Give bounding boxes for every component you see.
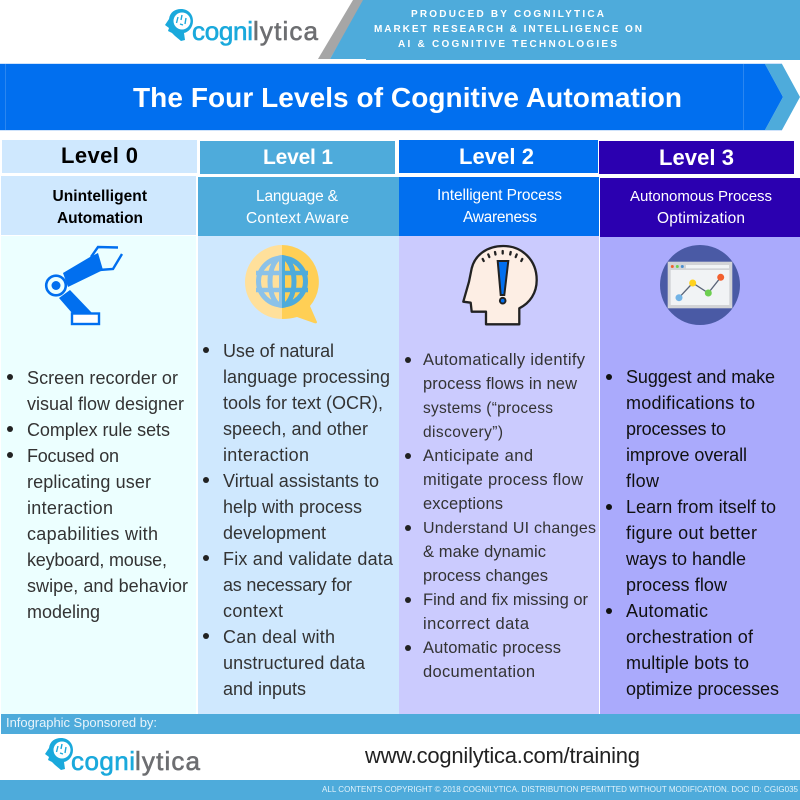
level 0 bullet list: keyboard, mouse, (27, 550, 167, 570)
level 1 subtitle: Context Aware (246, 210, 349, 227)
level 1 bullet list: language processing (223, 367, 390, 387)
level 2 bullet list: Understand UI changes (423, 520, 596, 537)
level 2 bullet list: Automatically identify (423, 351, 586, 369)
level 1 bullet list: Fix and validate data (223, 549, 394, 569)
level 2 bullet list (405, 351, 596, 681)
header banner: produced by: PRODUCED BY COGNILYTICA (411, 9, 604, 20)
level 0 bullet list: replicating user (27, 472, 151, 492)
level 3 bullet list: improve overall (626, 445, 747, 465)
level 1 subtitle (198, 177, 399, 236)
sponsor band: Infographic Sponsored by: (6, 715, 157, 730)
icon: head with exclamation mark (463, 246, 537, 324)
level 2 subtitle (399, 177, 599, 236)
level 2 bullet list: mitigate process flow (423, 471, 583, 489)
level 3 bullet list: processes to (626, 419, 726, 439)
copyright footer (0, 780, 800, 800)
level 2 bullet list: Anticipate and (423, 447, 533, 465)
level 1 bullet list: speech, and other (223, 419, 368, 439)
sponsor band (1, 714, 800, 734)
panel: level 3 (599, 141, 800, 714)
level 2 subtitle: Awareness (463, 209, 537, 226)
level 3 bullet list (606, 367, 779, 699)
level 3 subtitle: Optimization (657, 210, 745, 227)
level 0 bullet list: Complex rule sets (27, 420, 170, 440)
level 2 bullet list: exceptions (423, 495, 503, 513)
level 0 bullet list: modeling (27, 602, 100, 622)
header banner: produced by: MARKET RESEARCH & INTELLIGENCE ON (374, 24, 642, 35)
copyright footer: ALL CONTENTS COPYRIGHT © 2018 COGNILYTICA. DISTRIBUTION PERMITTED WITHOUT MODIFICATION. DOC ID: CGIG035 (322, 785, 799, 794)
level 3 subtitle (600, 178, 800, 237)
level 3 bullet list: Learn from itself to (626, 497, 776, 517)
level 3 bullet list: multiple bots to (626, 653, 749, 673)
level 0 bullet list: swipe, and behavior (27, 576, 188, 596)
level 2 bullet list: process flows in new (423, 375, 577, 393)
level 0 heading (2, 140, 197, 173)
level 1 bullet list: development (223, 523, 326, 543)
level 2 heading: Level 2 (459, 144, 534, 169)
level 3 heading (599, 141, 794, 174)
level 3 bullet list: modifications to (626, 393, 755, 413)
level 1 heading: Level 1 (263, 146, 333, 169)
level 0 bullet list: visual flow designer (27, 394, 184, 414)
level 1 bullet list: Use of natural (223, 341, 334, 361)
panel: level 2 (399, 140, 599, 714)
level 2 bullet list: documentation (423, 663, 535, 681)
level 3 bullet list: Suggest and make (626, 367, 775, 387)
level 0 subtitle (1, 176, 196, 235)
level 0 heading: Level 0 (61, 143, 138, 168)
level 1 bullet list: as necessary for (223, 575, 352, 595)
level 3 bullet list: ways to handle (625, 549, 746, 569)
logo: cognilytica header (165, 9, 319, 46)
level 1 bullet list: help with process (223, 497, 362, 517)
header banner: produced by (318, 0, 800, 60)
level 3 bullet list: process flow (626, 575, 728, 595)
level 1 heading (200, 141, 395, 174)
level 0 bullet list (7, 368, 188, 622)
level 0 bullet list: Focused on (27, 446, 119, 466)
level 1 bullet list: context (223, 601, 283, 621)
level 1 bullet list: tools for text (OCR), (223, 393, 383, 413)
level 1 bullet list: Can deal with (223, 627, 335, 647)
level 0 subtitle: Unintelligent (52, 188, 147, 205)
level 1 bullet list: unstructured data (223, 653, 366, 673)
level 2 bullet list: & make dynamic (423, 543, 546, 561)
level 1 bullet list: Virtual assistants to (223, 471, 379, 491)
level 2 bullet list: discovery”) (423, 424, 503, 441)
panel: level 0 (1, 140, 197, 714)
icon: robot arm (46, 247, 122, 324)
logo: cognilytica sponsor (45, 738, 201, 776)
logo: cognilytica sponsor: lytica (135, 746, 201, 776)
level 1 subtitle: Language & (256, 188, 339, 205)
level 1 bullet list (203, 341, 394, 699)
title banner with arrow: The Four Levels of Cognitive Automation (133, 82, 682, 113)
icon: globe speech bubble (245, 245, 319, 323)
level 3 bullet list: Automatic (626, 601, 708, 621)
level 1 bullet list: interaction (223, 445, 309, 465)
level 0 bullet list: capabilities with (27, 524, 158, 544)
level 3 bullet list: figure out better (626, 523, 757, 543)
title banner with arrow (0, 63, 800, 131)
level 3 bullet list: optimize processes (626, 679, 779, 699)
level 2 bullet list: systems (“process (423, 400, 553, 417)
level 2 bullet list: Automatic process (423, 639, 561, 657)
level 0 subtitle: Automation (57, 210, 143, 227)
panel: level 1 (198, 141, 399, 714)
logo: cognilytica sponsor: cogni (71, 746, 135, 776)
header banner: produced by: AI & COGNITIVE TECHNOLOGIES (398, 39, 617, 50)
level 3 heading: Level 3 (659, 145, 734, 170)
level 2 bullet list: process changes (423, 567, 548, 585)
level 3 bullet list: flow (626, 471, 660, 491)
level 2 bullet list: Find and fix missing or (423, 591, 588, 609)
level 0 bullet list: interaction (27, 498, 113, 518)
level 2 bullet list: incorrect data (423, 615, 530, 633)
level 0 bullet list: Screen recorder or (27, 368, 178, 388)
training url: www.cognilytica.com/training (364, 743, 640, 768)
level 2 heading (399, 140, 598, 173)
level 3 bullet list: orchestration of (626, 627, 754, 647)
level 3 subtitle: Autonomous Process (630, 188, 772, 205)
logo: cognilytica header: lytica (253, 16, 319, 46)
icon: browser window with line chart (660, 245, 740, 325)
logo: cognilytica header: cogni (192, 16, 253, 46)
level 1 bullet list: and inputs (223, 679, 306, 699)
level 2 subtitle: Intelligent Process (437, 187, 562, 204)
